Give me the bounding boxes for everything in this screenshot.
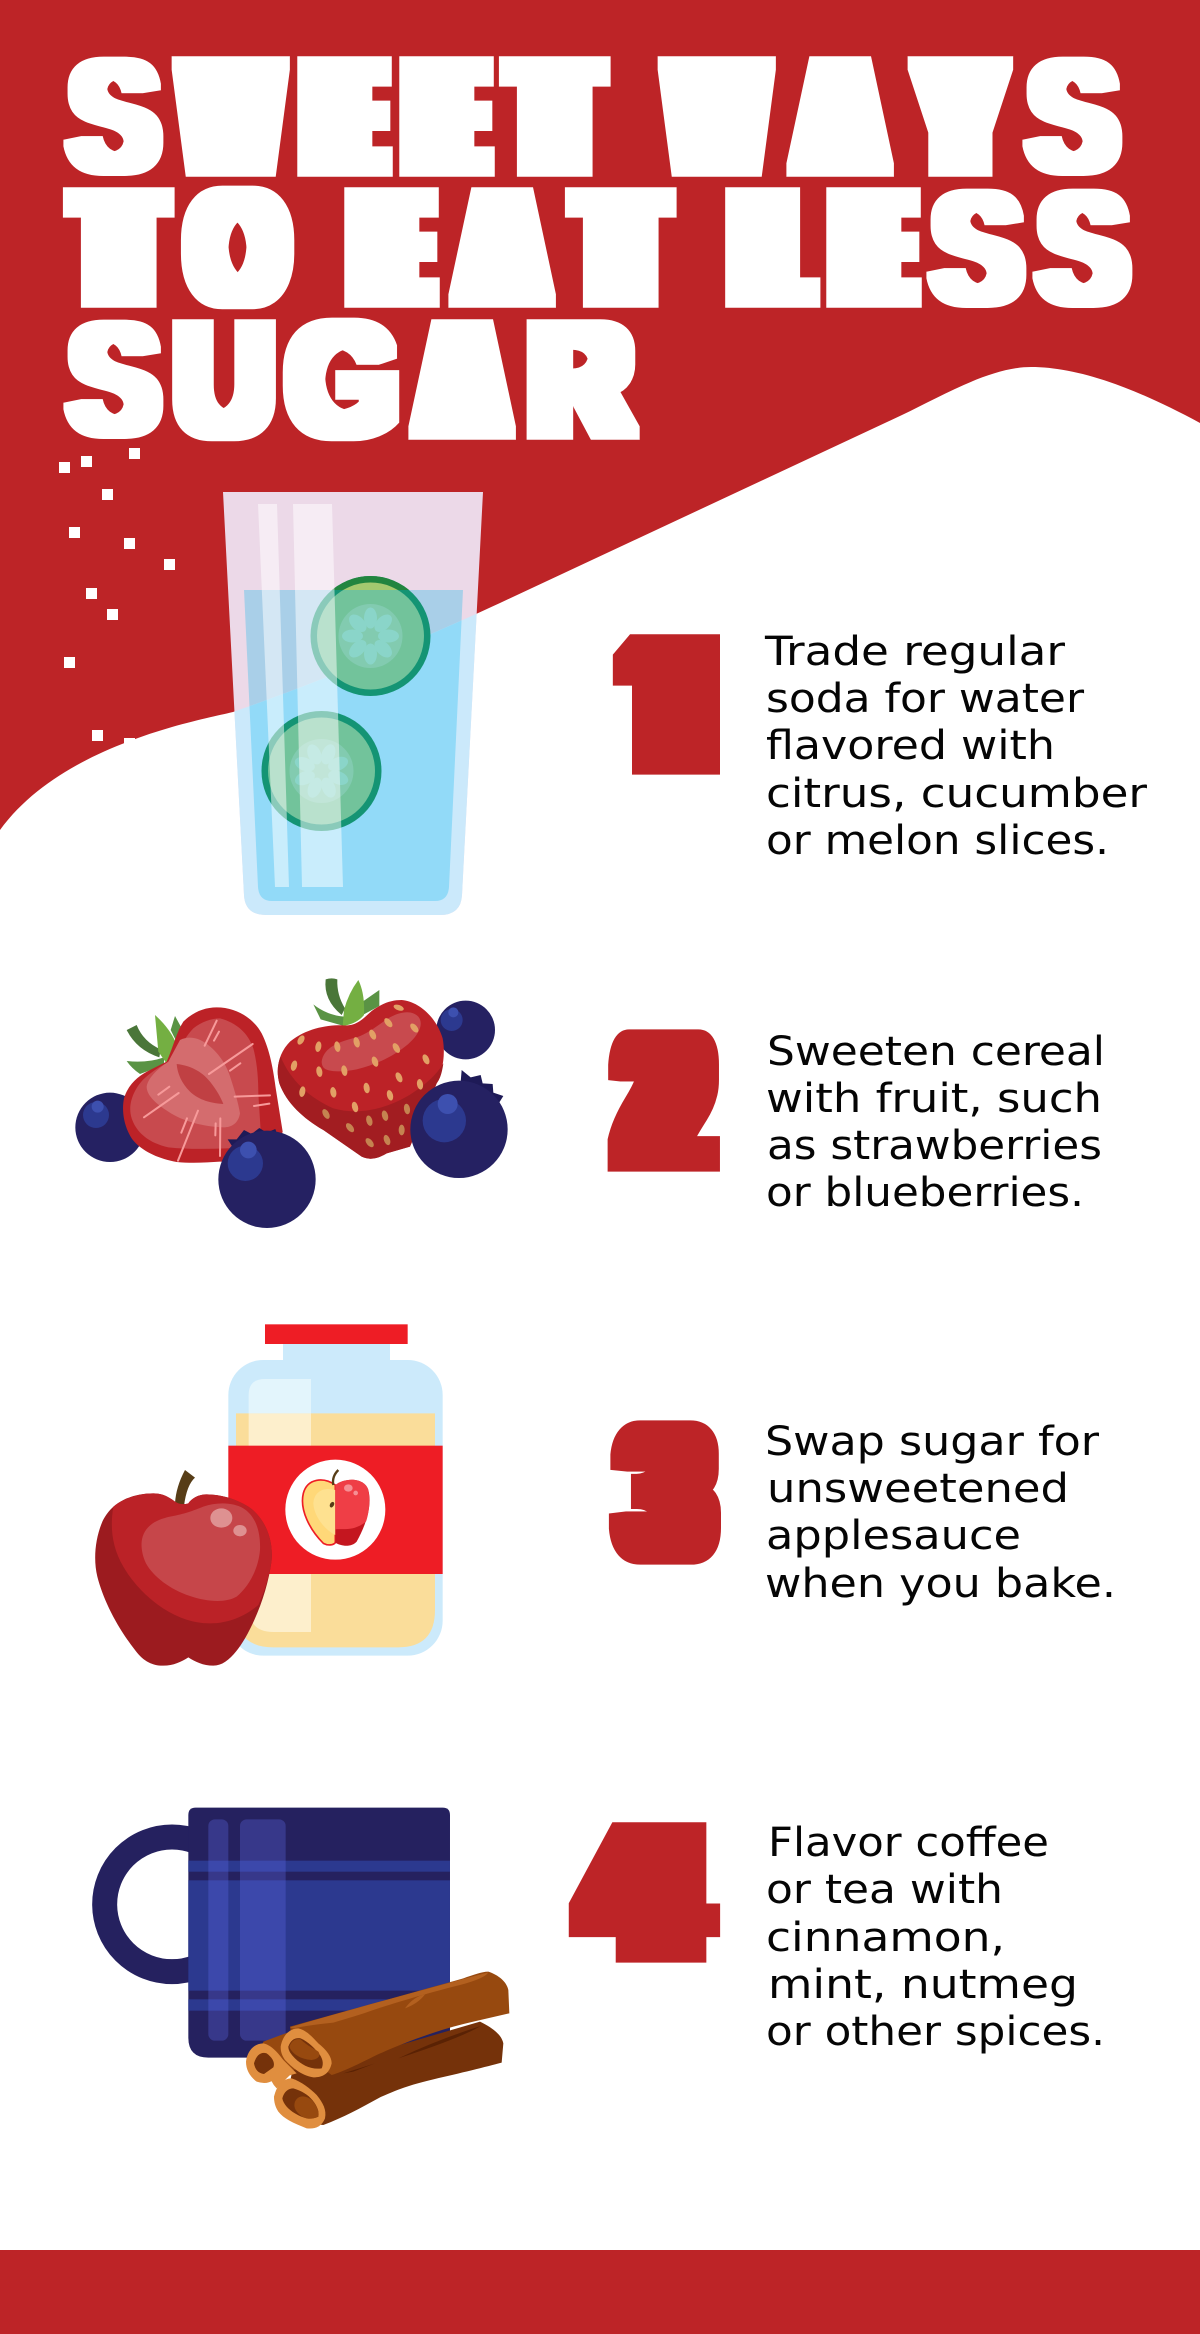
title: T — [596, 161, 646, 336]
title: E — [430, 30, 462, 205]
tip 3 text: applesauce — [766, 1513, 1021, 1559]
title: E — [374, 161, 407, 336]
title: E — [856, 161, 889, 336]
tip 2 text: as strawberries — [767, 1123, 1102, 1169]
title: S — [70, 28, 158, 207]
title: L — [754, 161, 788, 336]
tip 4 text: or tea with — [766, 1867, 1003, 1913]
jar — [228, 1324, 443, 1656]
number 3: 3 — [630, 1391, 700, 1596]
number 2: 2 — [639, 1000, 689, 1205]
tip 4 text: mint, nutmeg — [768, 1962, 1078, 2008]
cucumber slice lower — [262, 711, 382, 831]
tip 1 text: citrus, cucumber — [766, 771, 1148, 817]
icon: mug with cinnamon sticks — [105, 1808, 509, 2129]
title: R — [531, 292, 629, 467]
title: A — [469, 161, 535, 336]
blueberry bottom — [218, 1128, 316, 1228]
tip 3 text: Swap sugar for — [765, 1419, 1100, 1465]
apple — [95, 1470, 272, 1666]
title: O — [191, 161, 284, 336]
title: A — [429, 292, 495, 467]
tip 4 text: Flavor coffee — [768, 1820, 1049, 1866]
tip 3 text — [765, 1419, 1116, 1607]
title: S — [1039, 159, 1127, 338]
tip 2 text: with fruit, such — [766, 1076, 1102, 1122]
blueberry lower right — [410, 1070, 508, 1178]
tip 2 text: Sweeten cereal — [767, 1029, 1105, 1075]
blueberry upper right — [436, 1001, 495, 1059]
title: T — [94, 161, 143, 336]
bottom bar — [0, 2250, 1200, 2334]
title: T — [530, 30, 580, 205]
strawberry whole — [278, 978, 444, 1159]
tip 1 text: flavored with — [766, 723, 1055, 769]
title — [62, 28, 1132, 469]
title: S — [933, 159, 1021, 338]
icon: strawberries and blueberries — [75, 978, 508, 1228]
title: E — [328, 30, 360, 205]
tip 1 text: soda for water — [766, 676, 1085, 722]
tip 1 text: Trade regular — [764, 629, 1066, 675]
title: W — [679, 30, 755, 205]
number 1: 1 — [647, 603, 703, 808]
title: G — [288, 292, 397, 467]
tip 1 text — [764, 629, 1148, 864]
tip 2 text: or blueberries. — [766, 1170, 1084, 1216]
title: U — [175, 292, 273, 467]
tip 3 text: unsweetened — [767, 1466, 1069, 1512]
illustrations and tip text — [59, 448, 1147, 2128]
cinnamon sticks — [246, 1972, 509, 2129]
tip 1 text: or melon slices. — [766, 818, 1109, 864]
tip 2 text — [766, 1029, 1105, 1216]
title: Y — [932, 30, 989, 205]
tip 3 text: when you bake. — [765, 1561, 1116, 1607]
number 4: 4 — [602, 1791, 686, 1996]
title: S — [1029, 28, 1117, 207]
tip 4 text: or other spices. — [766, 2009, 1105, 2055]
blueberry left — [75, 1093, 145, 1162]
title: S — [70, 290, 158, 469]
icon: glass of cucumber water — [223, 492, 483, 915]
stick ends — [246, 2043, 297, 2083]
sugar grains — [59, 448, 175, 749]
tip 4 text — [766, 1820, 1105, 2055]
cucumber slice upper — [310, 576, 430, 696]
tip 4 text: cinnamon, — [766, 1915, 1005, 1961]
label apple half — [302, 1470, 370, 1546]
icon: applesauce jar and apple — [95, 1324, 443, 1666]
mug — [105, 1808, 450, 2058]
title: W — [193, 30, 269, 205]
title: A — [807, 30, 873, 205]
strawberry halved — [123, 1007, 283, 1163]
